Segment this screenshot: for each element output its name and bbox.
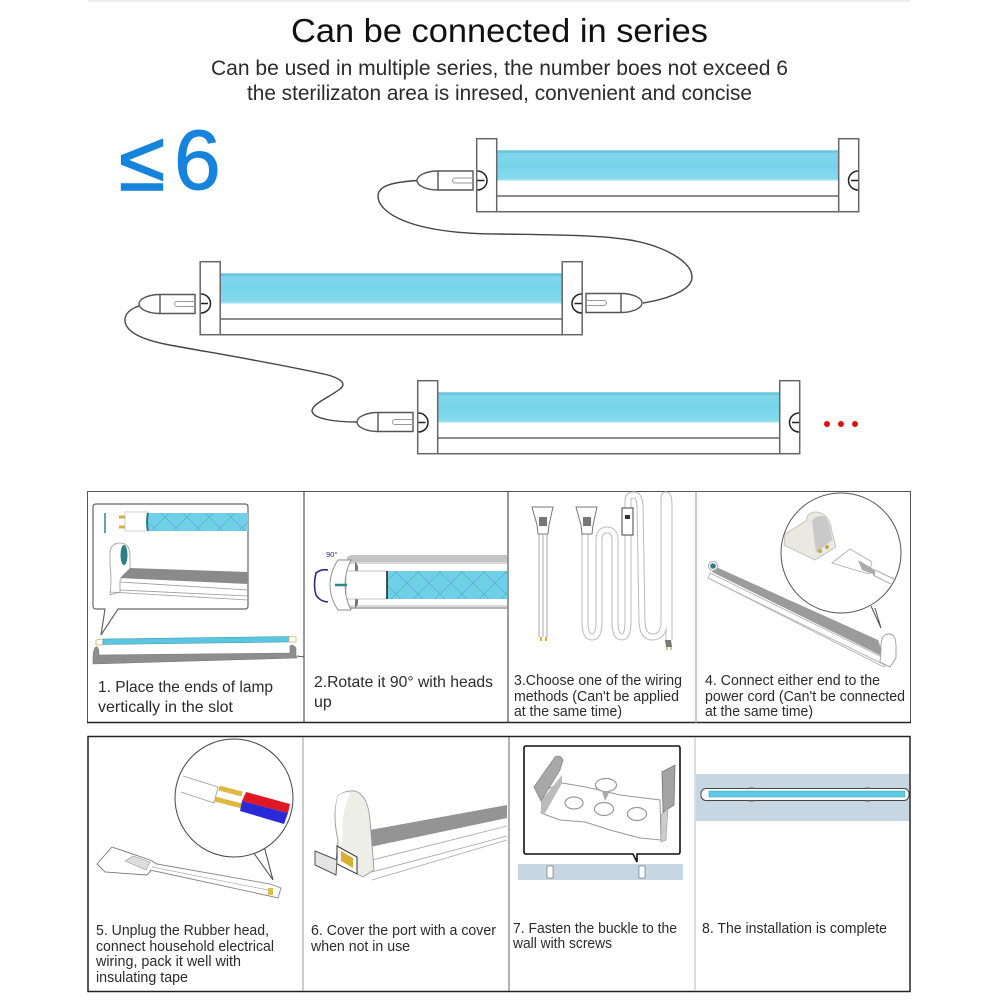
step 5 text: 5. Unplug the Rubber head, [96, 922, 269, 939]
step 4 text: 4. Connect either end to the [705, 672, 880, 689]
step 6 text [310, 922, 496, 955]
step 4 text [705, 672, 905, 720]
angled rail [708, 562, 896, 667]
step 1 text [98, 679, 273, 716]
mounting strip with clips [518, 864, 683, 880]
panel 2: rotate 90 degrees [314, 550, 507, 711]
full rail [93, 645, 297, 664]
step 3 text: methods (Can't be applied [514, 688, 679, 705]
panel 3: wiring methods [514, 495, 682, 720]
step 2 text: up [314, 694, 332, 711]
zoom circle with wires [175, 739, 293, 880]
top edge band [88, 0, 910, 2]
limit symbol: at most 6 [119, 113, 221, 208]
step 6 text: 6. Cover the port with a cover [311, 922, 496, 939]
subtitle text [211, 57, 788, 105]
step 3 text: at the same time) [514, 703, 622, 720]
connection diagram [125, 139, 859, 454]
panel 6: port cover [310, 791, 507, 955]
left plug on lamp 2 [139, 294, 195, 314]
90 degree label: 90° [326, 550, 337, 559]
rubber head plug with cable [97, 847, 281, 898]
right plug on lamp 2 [586, 294, 642, 312]
step 3 text: 3.Choose one of the wiring [514, 672, 682, 689]
lamp 3 [418, 381, 800, 454]
limit symbol: at most 6: 6 [174, 113, 221, 207]
lamp 2 [200, 262, 582, 335]
port cover [315, 851, 337, 875]
limit symbol: at most 6: ≤ [119, 114, 165, 208]
callout with zoomed lamp end [93, 504, 248, 635]
step 7 text: 7. Fasten the buckle to the [513, 920, 677, 937]
plug on lamp 3 [357, 412, 413, 432]
step 4 text: at the same time) [705, 703, 813, 720]
callout with buckle detail [524, 746, 680, 862]
plug on lamp 1 [417, 171, 473, 190]
step 2 text [314, 674, 493, 711]
step 7 text: wall with screws [512, 935, 612, 952]
step 2 text: 2.Rotate it 90° with heads [314, 674, 493, 691]
step 5 text: connect household electrical [96, 938, 274, 955]
subtitle text: the sterilizaton area is inresed, convenient and concise [247, 82, 752, 105]
long cable with switch and plug [576, 495, 672, 650]
step 4 text: power cord (Can't be connected [705, 688, 905, 705]
step 1 text: 1. Place the ends of lamp [98, 679, 273, 696]
panel row 1 frame [87, 491, 911, 723]
rotated tube illustration [314, 550, 507, 610]
step 1 text: vertically in the slot [98, 699, 234, 716]
wire from lamp 1 to lamp 2 [378, 180, 692, 303]
panel 8: installation complete [696, 774, 909, 937]
title: Can be connected in series [291, 12, 708, 49]
step 5 text: wiring, pack it well with [95, 953, 241, 970]
step 3 text [514, 672, 682, 720]
step 5 text [95, 922, 274, 986]
zoom circle with connector [781, 493, 901, 628]
panel 7: buckle [512, 746, 683, 952]
panel row 2 frame [88, 736, 910, 992]
red continuation dots [824, 421, 858, 427]
step 8 text: 8. The installation is complete [702, 920, 887, 937]
full lamp [96, 636, 296, 645]
rotation arrow [314, 570, 328, 602]
subtitle text: Can be used in multiple series, the number boes not exceed 6 [211, 57, 788, 80]
step 7 text [512, 920, 677, 952]
lamp 1 [477, 139, 859, 212]
bracket end illustration [315, 791, 507, 880]
panel 1: place lamp in slot [93, 504, 304, 716]
panel 4: connect power cord [705, 493, 905, 720]
installed lamp on wall strip [696, 774, 909, 821]
wire from lamp 2 to lamp 3 [125, 306, 358, 422]
panel 5: wiring [95, 739, 293, 986]
step 5 text: insulating tape [96, 969, 188, 986]
step 6 text: when not in use [310, 938, 410, 955]
short connector cable [532, 507, 553, 641]
